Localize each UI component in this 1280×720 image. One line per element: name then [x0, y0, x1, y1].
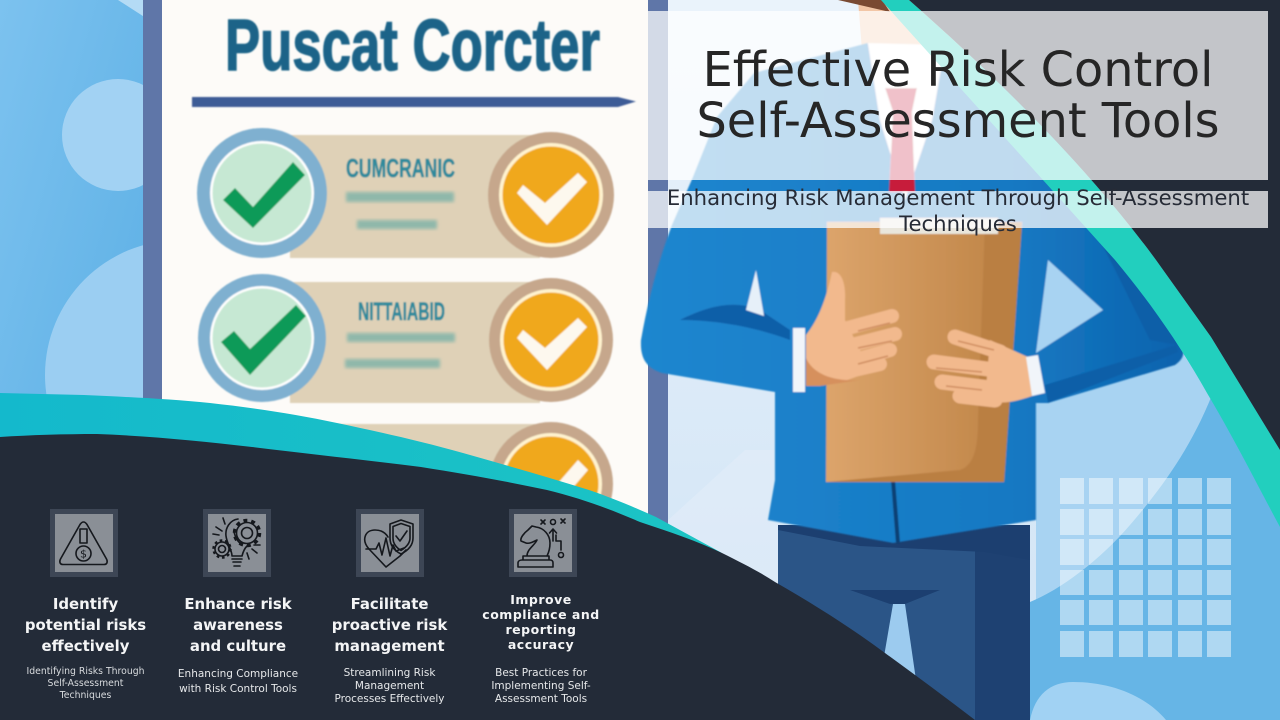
tie	[885, 88, 917, 192]
light grid of squares	[1060, 478, 1231, 657]
heading: potential risks	[25, 616, 146, 634]
trousers	[778, 525, 1030, 720]
heading: reporting	[506, 622, 576, 637]
heading	[25, 595, 146, 655]
sleeve shadows	[680, 130, 1178, 403]
subtitle: Enhancing Risk Management Through Self-Assessment	[667, 185, 1249, 210]
heading	[184, 595, 293, 655]
heading: management	[334, 637, 445, 655]
description: Self-Assessment	[48, 678, 124, 689]
description: with Risk Control Tools	[179, 683, 297, 695]
teal arc	[881, 0, 1280, 527]
description	[491, 667, 591, 705]
heading: awareness	[193, 616, 283, 634]
description: Assessment Tools	[495, 693, 587, 705]
checklist row 3	[290, 422, 613, 546]
subtitle: Techniques	[898, 211, 1017, 236]
description: Enhancing Compliance	[178, 668, 298, 680]
heading: Improve	[510, 592, 572, 607]
description: Implementing Self-	[491, 680, 591, 692]
heading: Identify	[53, 595, 118, 613]
column 4: improve compliance	[482, 509, 600, 705]
title panel	[648, 11, 1268, 180]
shirt	[868, 43, 945, 200]
headline rule	[192, 97, 636, 107]
heading	[332, 595, 448, 655]
clipboard	[826, 218, 1022, 482]
poster headline: Puscat Corcter	[225, 6, 600, 86]
left hand and cuff	[793, 272, 895, 392]
description: Techniques	[59, 690, 111, 701]
description: Management	[355, 680, 424, 692]
checklist row 2: NITTAIABID	[358, 298, 445, 326]
checklist row 1	[197, 128, 614, 258]
neck and hair	[838, 0, 948, 78]
dark swoosh	[0, 434, 975, 720]
heading: proactive risk	[332, 616, 448, 634]
right wall	[666, 0, 1280, 720]
icon: gears and light bulb	[203, 509, 271, 577]
dark corner	[909, 0, 1280, 450]
lapel seam	[893, 480, 898, 543]
description	[26, 666, 145, 701]
description	[178, 668, 298, 695]
heading: and culture	[190, 637, 286, 655]
bottom-left dark swoosh with teal arc	[0, 393, 975, 720]
checklist row 2	[198, 274, 613, 403]
icon: heart with shield	[356, 509, 424, 577]
column 1: identify risks	[25, 509, 146, 701]
icon: warning triangle with dollar	[50, 509, 118, 577]
jacket and arms	[641, 43, 1183, 543]
heading: Enhance risk	[184, 595, 293, 613]
column 2: enhance awareness	[178, 509, 298, 695]
icon: chess knight strategy	[509, 509, 577, 577]
top-right dark corner with teal arc	[881, 0, 1280, 527]
description: Processes Effectively	[334, 693, 445, 705]
right hand and cuff	[934, 337, 1045, 403]
column 3: proactive management	[332, 509, 448, 705]
heading: Facilitate	[351, 595, 428, 613]
poster board	[143, 0, 668, 560]
businessman	[641, 0, 1183, 720]
description	[334, 667, 445, 705]
heading: accuracy	[508, 637, 574, 652]
arm gaps	[746, 270, 764, 316]
description: Best Practices for	[495, 667, 588, 679]
heading: effectively	[42, 637, 130, 655]
description: Streamlining Risk	[344, 667, 436, 679]
title: Effective Risk Control	[703, 43, 1213, 98]
checklist row 1: CUMCRANIC	[346, 153, 455, 183]
left wall with circles	[0, 0, 315, 520]
icon: warning triangle with dollar: $	[80, 548, 87, 560]
heading: compliance and	[482, 607, 600, 622]
subtitle	[667, 185, 1249, 236]
subtitle panel	[648, 185, 1268, 236]
description: Identifying Risks Through	[26, 666, 145, 677]
teal swoosh	[0, 393, 722, 553]
title: Self-Assessment Tools	[696, 94, 1220, 149]
heading	[482, 592, 600, 652]
title	[696, 43, 1220, 149]
